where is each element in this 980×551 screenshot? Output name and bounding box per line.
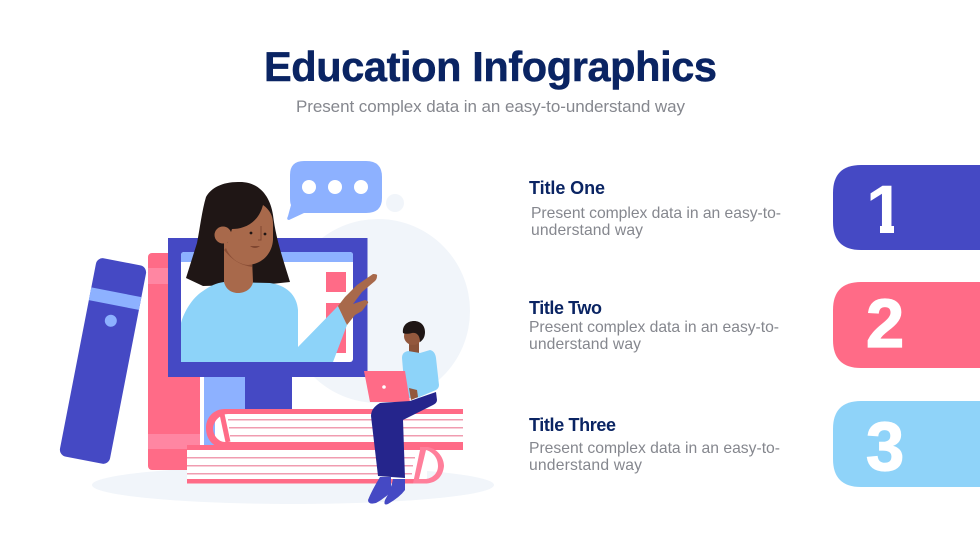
leaning blue book	[59, 257, 147, 465]
seated student	[364, 321, 439, 504]
ground shadow	[92, 466, 494, 504]
stacked books	[187, 409, 463, 484]
item 1 text: Title One	[529, 178, 605, 198]
item 1 text	[529, 178, 781, 239]
item 2 text: Present complex data in an easy-to-	[529, 319, 779, 336]
laptop	[364, 371, 410, 402]
student shirt	[402, 350, 439, 398]
item 3 text: Present complex data in an easy-to-	[529, 440, 780, 457]
number tab 2: 2	[866, 285, 904, 362]
background circle	[286, 219, 470, 403]
small decorative circle	[386, 194, 404, 212]
item 2 text: Title Two	[529, 298, 602, 318]
student hair	[403, 321, 425, 342]
number tab 1: 1	[866, 171, 904, 248]
number tab 3: 3	[866, 408, 904, 485]
head	[404, 327, 422, 345]
trousers	[371, 392, 437, 478]
item 2 text	[529, 298, 779, 353]
item 1 text: understand way	[531, 222, 643, 239]
title: Education Infographics	[264, 43, 717, 90]
monitor	[168, 238, 368, 377]
shirt	[181, 282, 347, 362]
hand	[338, 274, 377, 325]
woman teacher	[181, 182, 377, 362]
upper book cover	[206, 409, 463, 447]
number tab 2	[833, 282, 980, 368]
upper book pages	[215, 414, 463, 442]
lower book cover	[187, 445, 463, 450]
lower book pages	[187, 450, 427, 479]
monitor stand	[204, 377, 292, 449]
item 3 text	[529, 415, 780, 474]
illustration: teacher on monitor with books	[59, 161, 494, 504]
upright pink book	[148, 253, 200, 470]
speech bubble	[287, 161, 382, 220]
item 3 text: Title Three	[529, 415, 616, 435]
socks and shoes	[368, 477, 391, 504]
item 3 text: understand way	[529, 457, 642, 474]
number tab 3	[833, 401, 980, 487]
hair	[186, 182, 290, 286]
subtitle: Present complex data in an easy-to-understand way	[296, 97, 686, 116]
item 2 text: understand way	[529, 336, 641, 353]
lower book spine	[413, 447, 444, 484]
ear	[214, 226, 232, 244]
item 1 text: Present complex data in an easy-to-	[531, 205, 781, 222]
eyes, nose and mouth	[250, 226, 266, 248]
neck	[224, 240, 253, 293]
face	[226, 205, 273, 265]
laptop base	[405, 396, 427, 402]
student hand	[409, 388, 418, 400]
number tab 1	[833, 165, 980, 250]
neck	[409, 340, 419, 353]
